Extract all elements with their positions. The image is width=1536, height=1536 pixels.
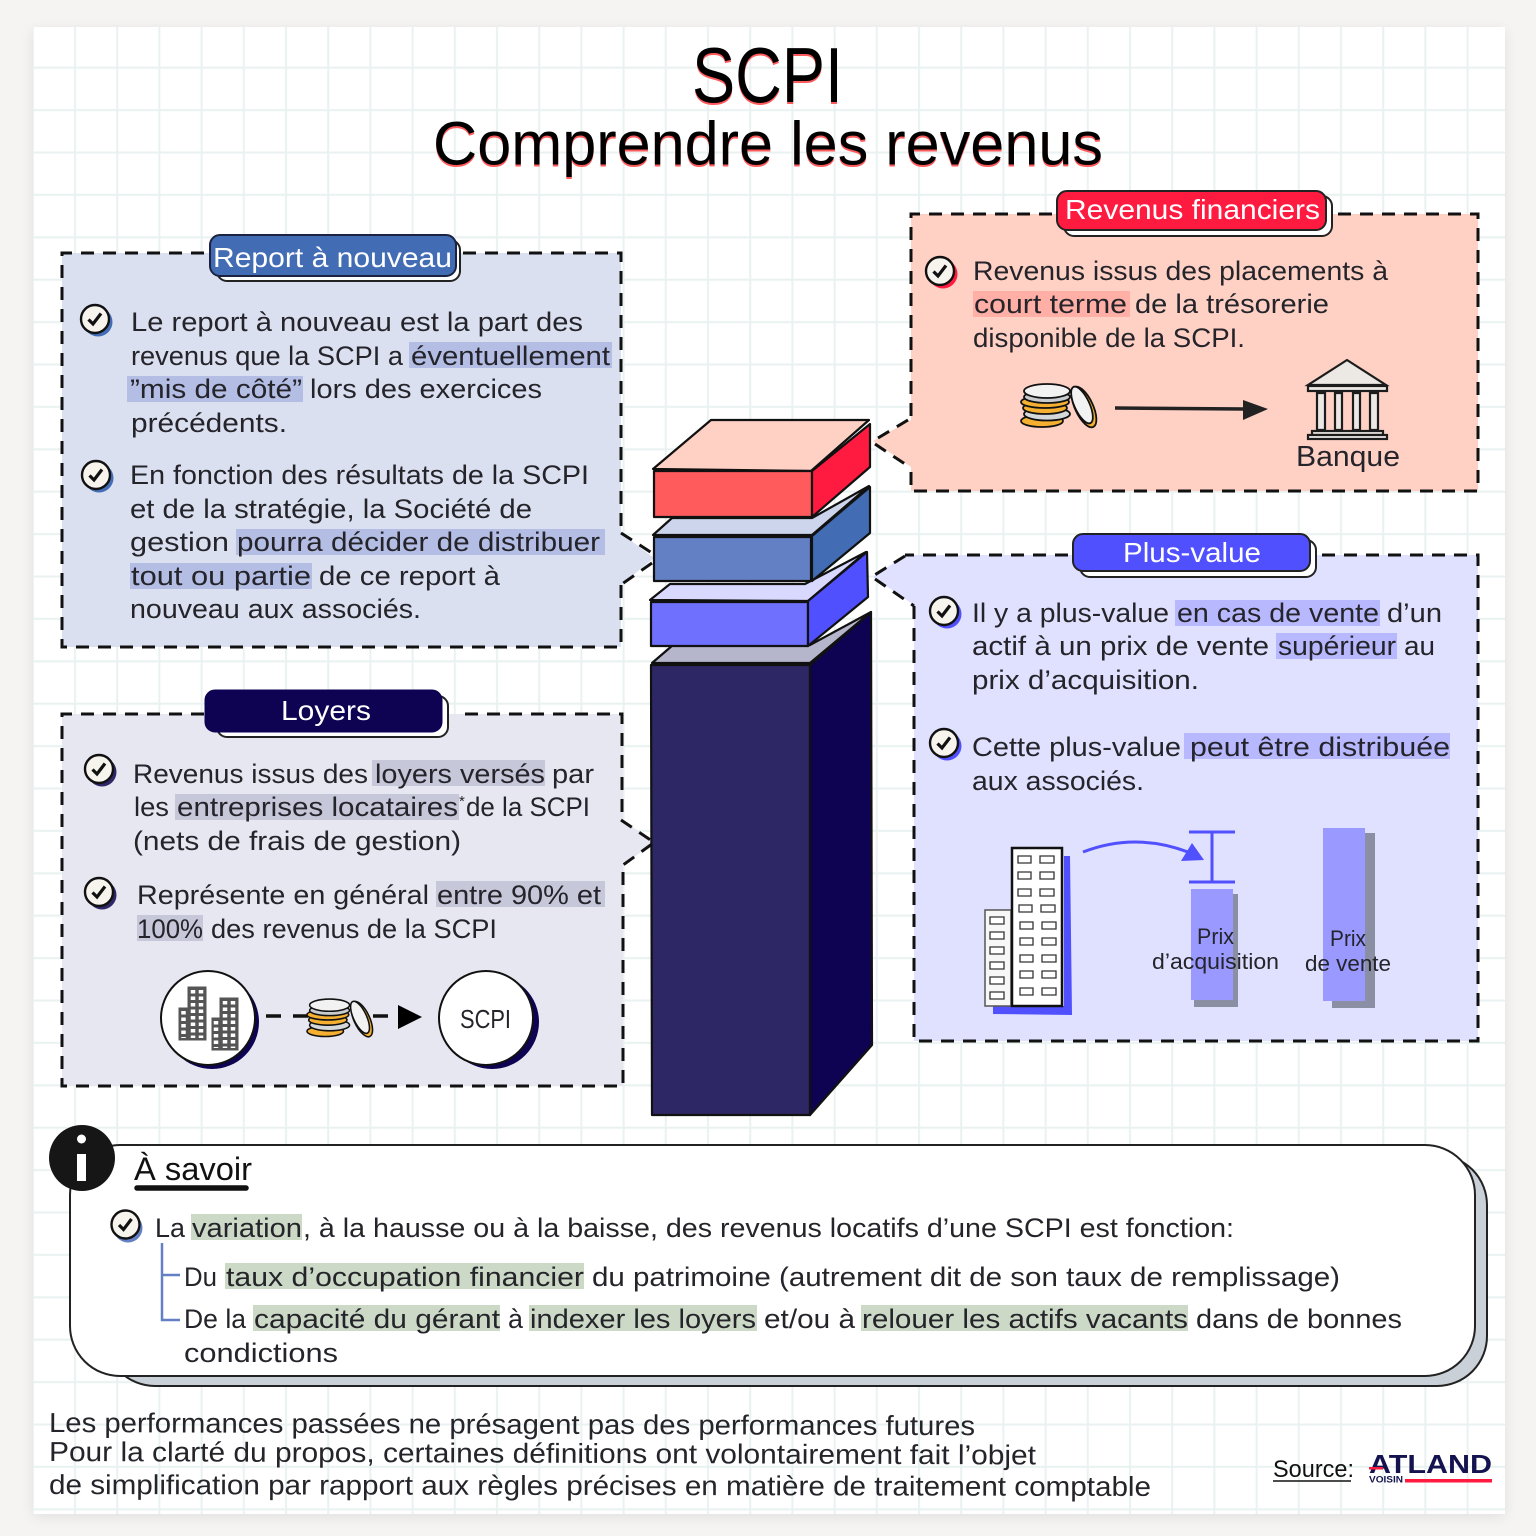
text block: distribution xyxy=(130,460,605,624)
icon: check xyxy=(85,755,116,786)
text block: distribution plus-value: aux associés. xyxy=(972,766,1144,796)
text block: facteurs: De la xyxy=(184,1304,246,1334)
icon: info xyxy=(49,1125,115,1191)
bar: prix d'acquisition: d’acquisition xyxy=(1152,949,1279,974)
arrow: vers la banque xyxy=(1115,400,1268,420)
text block: placements: disponible de la SCPI. xyxy=(973,323,1245,353)
text block: facteurs: relouer les actifs vacants xyxy=(862,1304,1188,1334)
icon: check xyxy=(926,257,958,288)
panel: à savoir xyxy=(49,1125,1487,1386)
text block: loyers versés: entreprises locataires xyxy=(177,792,458,822)
panel: report à nouveau xyxy=(62,235,654,647)
title xyxy=(433,31,1103,180)
bar: prix de vente xyxy=(1305,828,1391,1008)
block: plus-value xyxy=(650,552,868,646)
text block: définition plus-value: Il y a plus-value xyxy=(972,598,1169,628)
tag: loyers xyxy=(205,690,448,737)
block: loyers xyxy=(651,612,872,1115)
heading: à savoir: À savoir xyxy=(134,1151,252,1187)
text block: definition: précédents. xyxy=(131,408,287,438)
text block: loyers versés: * xyxy=(459,793,465,810)
text block: definition: éventuellement xyxy=(411,341,611,371)
text block: loyers versés: de la SCPI xyxy=(466,792,590,822)
text block: loyers versés: les xyxy=(134,792,169,822)
text block: définition plus-value: supérieur xyxy=(1278,631,1396,661)
text block: loyers versés: (nets de frais de gestion) xyxy=(133,826,461,856)
arrow: flux de loyers xyxy=(266,998,422,1040)
icon: check xyxy=(112,1210,142,1242)
icon: cercle SCPI: SCPI xyxy=(460,1004,511,1034)
tag: loyers: Loyers xyxy=(281,695,371,726)
disclaimer: Pour la clarté du propos, certaines définitions ont volontairement fait l’objet xyxy=(49,1436,1036,1470)
tag: report à nouveau: Report à nouveau xyxy=(213,242,452,273)
source: Source: xyxy=(1273,1456,1354,1483)
bar: prix d'acquisition xyxy=(1152,889,1279,1007)
text block: définition plus-value: en cas de vente xyxy=(1177,598,1379,628)
logo: atland voisin: VOISIN xyxy=(1369,1474,1403,1486)
bar: prix d'acquisition: Prix xyxy=(1197,924,1234,949)
disclaimer xyxy=(49,1407,1151,1502)
icon: check xyxy=(85,878,116,910)
text block: distribution plus-value: peut être distribuée xyxy=(1190,732,1450,762)
tag: report à nouveau xyxy=(210,235,460,281)
icon: pièces xyxy=(1021,383,1101,431)
text block: distribution plus-value xyxy=(972,732,1450,796)
icon: banque xyxy=(1308,360,1387,439)
tree lines xyxy=(162,1243,180,1320)
text block: definition xyxy=(127,307,612,438)
text block: facteurs: capacité du gérant xyxy=(254,1304,501,1334)
panel: plus-value xyxy=(873,534,1478,1041)
tag: revenus financiers xyxy=(1057,191,1332,236)
text block: définition plus-value xyxy=(972,598,1442,695)
text block: distribution: de ce report à xyxy=(319,561,500,591)
panel: revenus financiers xyxy=(873,191,1478,491)
chart: pile de revenus xyxy=(650,420,872,1115)
disclaimer: de simplification par rapport aux règles précises en matière de traitement comptable xyxy=(49,1469,1151,1502)
text block: variation: La xyxy=(155,1213,185,1243)
text block: distribution: nouveau aux associés. xyxy=(130,594,421,624)
icon: check xyxy=(930,729,962,760)
icon: immeubles dans un cercle xyxy=(161,971,259,1069)
panel: loyers xyxy=(62,690,654,1086)
text block: 90 à 100%: entre 90% et xyxy=(437,880,602,910)
icon: écart de prix xyxy=(1189,832,1235,882)
text block: 90 à 100% xyxy=(137,880,605,944)
text block: definition: Le report à nouveau est la part des xyxy=(131,307,583,337)
text block: facteurs: et/ou à xyxy=(764,1304,855,1334)
text block: 90 à 100%: 100% xyxy=(137,914,203,944)
text block: facteurs: indexer les loyers xyxy=(530,1304,756,1334)
tag: plus-value xyxy=(1073,534,1316,577)
title: SCPI xyxy=(692,31,843,119)
text block: loyers versés: loyers versés xyxy=(375,759,545,789)
tag: revenus financiers: Revenus financiers xyxy=(1065,194,1320,225)
text block: definition: ”mis de côté” xyxy=(130,374,302,404)
text block: distribution: pourra décider de distribuer xyxy=(237,527,600,557)
text block: facteurs: Du xyxy=(184,1262,217,1292)
text block: facteurs: du patrimoine (autrement dit de son taux de remplissage) xyxy=(592,1262,1340,1292)
text block: loyers versés xyxy=(133,759,594,856)
tag: plus-value: Plus-value xyxy=(1123,537,1261,568)
text block: définition plus-value: actif à un prix de vente xyxy=(972,631,1269,661)
text block: définition plus-value: au xyxy=(1404,631,1435,661)
bar: prix de vente: de vente xyxy=(1305,951,1391,976)
icon: check xyxy=(82,461,114,492)
title: Comprendre les revenus xyxy=(433,110,1103,178)
bar: prix de vente: Prix xyxy=(1330,926,1366,951)
text block: loyers versés: par xyxy=(552,759,594,789)
text block: placements xyxy=(973,256,1388,353)
text block: definition: lors des exercices xyxy=(310,374,542,404)
block: revenus financiers xyxy=(653,420,870,517)
text block: facteurs: condictions xyxy=(184,1338,338,1368)
text block: facteurs: dans de bonnes xyxy=(1196,1304,1402,1334)
text block: variation: variation xyxy=(192,1213,302,1243)
text block: distribution plus-value: Cette plus-value xyxy=(972,732,1181,762)
text block: définition plus-value: prix d’acquisition. xyxy=(972,665,1199,695)
label: banque: Banque xyxy=(1296,441,1400,473)
icon: check xyxy=(930,597,962,628)
icon: pièces xyxy=(307,998,377,1040)
text block: facteurs: taux d’occupation financier xyxy=(226,1262,584,1292)
text block: facteurs xyxy=(184,1262,1402,1368)
text block: distribution: tout ou partie xyxy=(131,561,311,591)
disclaimer: Les performances passées ne présagent pas des performances futures xyxy=(49,1407,975,1441)
text block: variation: , à la hausse ou à la baisse, des revenus locatifs d’une SCPI est fonction: xyxy=(303,1213,1234,1243)
text block: placements: de la trésorerie xyxy=(1135,289,1329,319)
arrow: vers la plus-value xyxy=(1083,842,1204,861)
text block: 90 à 100%: des revenus de la SCPI xyxy=(211,914,497,944)
text block: définition plus-value: d’un xyxy=(1387,598,1442,628)
block: report à nouveau xyxy=(653,486,870,581)
text block: facteurs: à xyxy=(508,1304,523,1334)
text block: distribution: et de la stratégie, la Société de xyxy=(130,494,532,524)
title: SCPI xyxy=(692,33,843,121)
text block: loyers versés: Revenus issus des xyxy=(133,759,368,789)
icon: immeuble xyxy=(985,848,1072,1015)
text block: definition: revenus que la SCPI a xyxy=(131,341,403,371)
text block: 90 à 100%: Représente en général xyxy=(137,880,429,910)
icon: check xyxy=(81,305,112,336)
icon: cercle SCPI xyxy=(439,971,539,1069)
logo: atland voisin: ATLAND xyxy=(1369,1449,1492,1479)
text block: placements: Revenus issus des placements à xyxy=(973,256,1388,286)
text block: placements: court terme xyxy=(974,289,1127,319)
title: Comprendre les revenus xyxy=(433,112,1103,180)
text block: distribution: En fonction des résultats de la SCPI xyxy=(130,460,589,490)
text block: distribution: gestion xyxy=(130,527,229,557)
